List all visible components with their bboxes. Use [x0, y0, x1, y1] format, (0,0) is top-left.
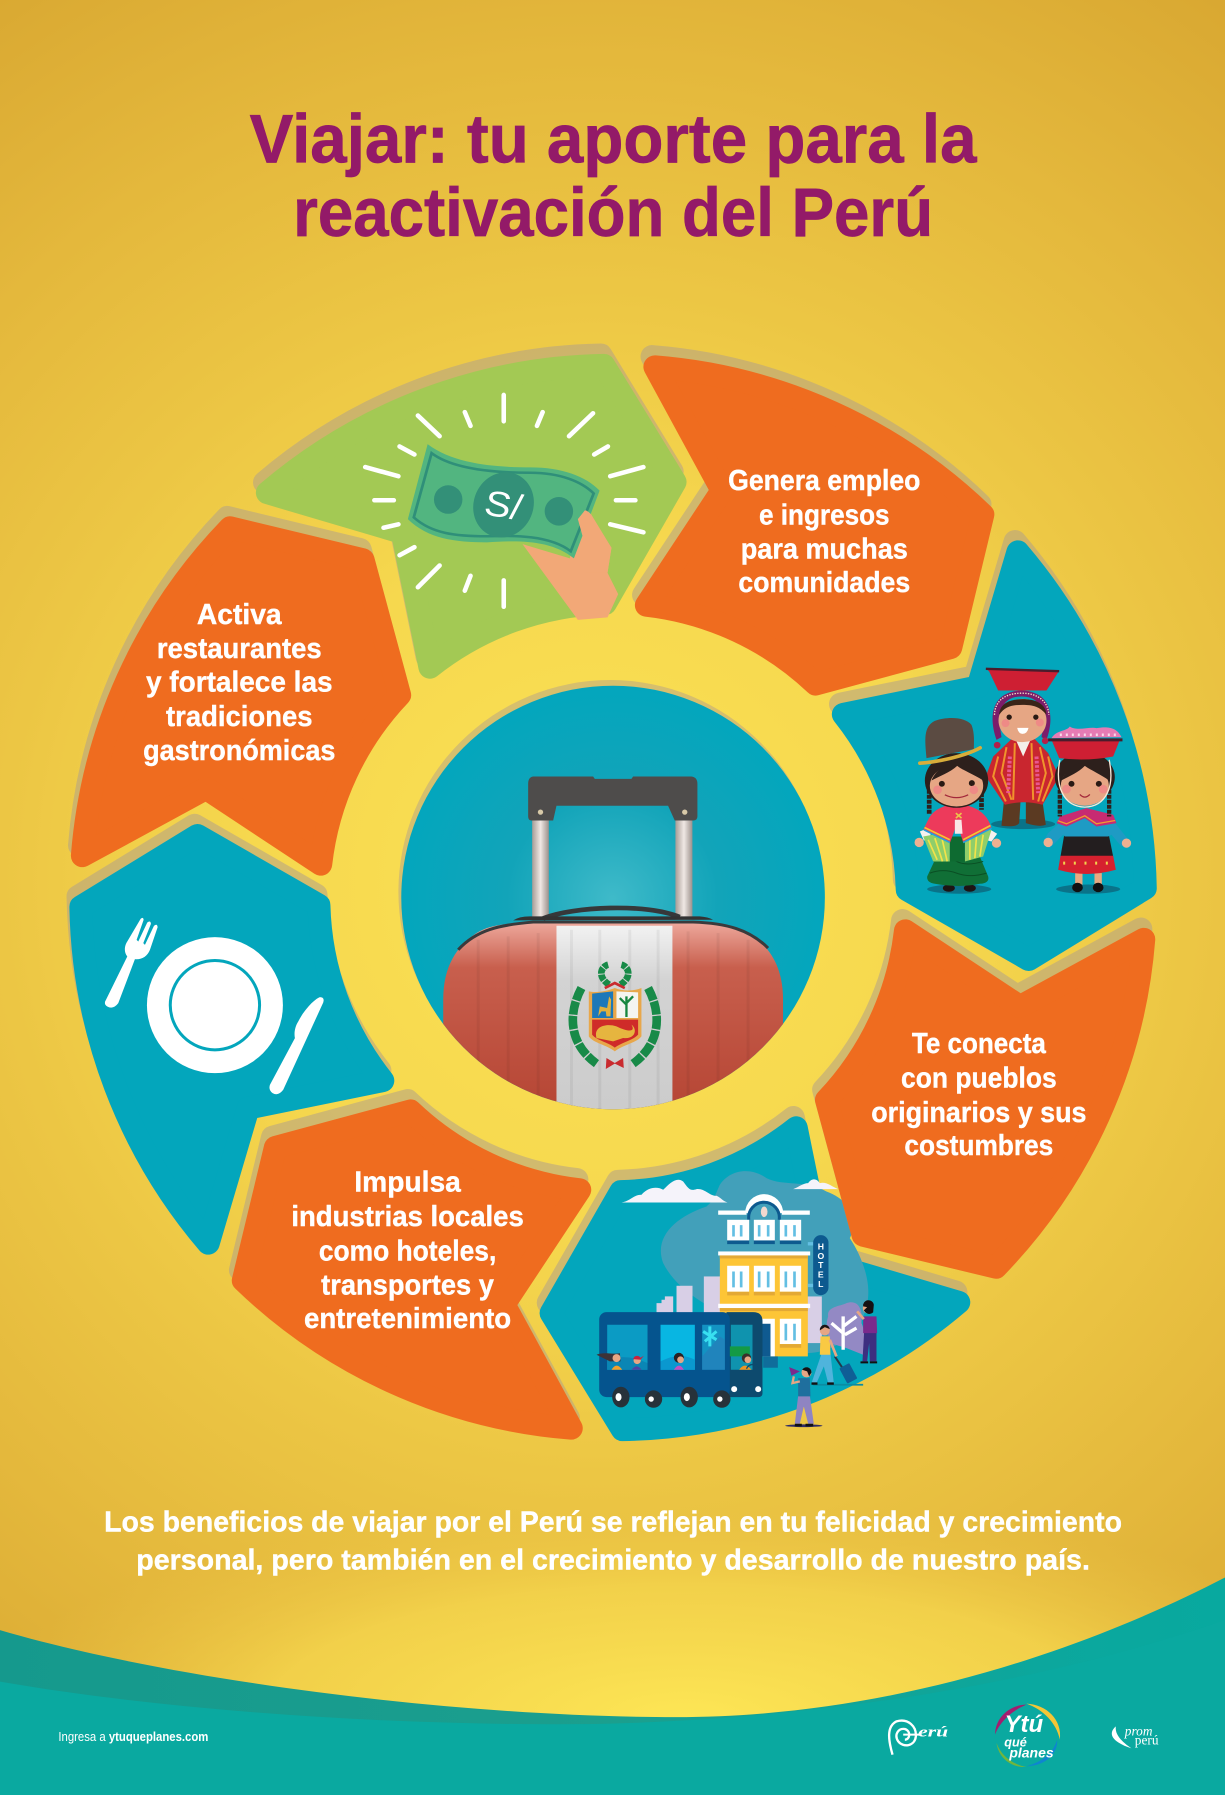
closing statement: personal, pero también en el crecimiento y desarrollo de nuestro país.	[136, 1544, 1090, 1576]
text: impulsa: transportes y	[321, 1270, 494, 1302]
text: activa	[143, 599, 335, 767]
footer teal band	[0, 1577, 1225, 1795]
text: genera empleo: Genera empleo	[728, 465, 920, 497]
hotel sign: L	[818, 1279, 824, 1289]
icon: banknote and hand: S/	[481, 483, 526, 528]
text: genera empleo: comunidades	[738, 567, 910, 599]
illustration: hotel, bus and travellers	[597, 1171, 877, 1427]
logo: promperú	[1112, 1723, 1159, 1748]
text: activa: restaurantes	[157, 633, 322, 665]
text: genera empleo: para muchas	[741, 534, 908, 566]
hotel sign: H	[818, 1241, 824, 1251]
title: Viajar: tu aporte para la	[250, 101, 977, 178]
icon: three andean figures	[915, 668, 1131, 894]
rear bus	[720, 1312, 763, 1397]
title: reactivación del Perú	[293, 174, 933, 251]
logo: Y tú qué planes: qué	[1004, 1735, 1027, 1749]
right woman	[1043, 726, 1131, 892]
text: impulsa: como hoteles,	[319, 1235, 496, 1267]
central circle: suitcase	[398, 680, 825, 1146]
footer link: Ingresa a ytuqueplanes.com	[58, 1730, 208, 1744]
man	[986, 668, 1059, 826]
logo: Y tú qué planes: Ytú	[1005, 1711, 1043, 1738]
passengers	[597, 1353, 760, 1370]
text: activa: Activa	[197, 599, 283, 631]
panel: plate (teal)	[78, 825, 383, 1243]
text: impulsa	[291, 1167, 524, 1335]
panel: people (teal)	[840, 541, 1145, 960]
traveller with beard	[857, 1300, 877, 1363]
text: activa: tradiciones	[166, 701, 313, 733]
panel: activa (orange)	[0, 467, 494, 979]
front bus	[599, 1312, 730, 1397]
hotel sign: T	[818, 1260, 824, 1270]
text: genera empleo: e ingresos	[759, 499, 890, 531]
text: impulsa: entretenimiento	[304, 1303, 511, 1335]
logo: promperú: perú	[1135, 1733, 1159, 1748]
closing statement	[104, 1507, 1122, 1576]
hotel sign: E	[818, 1269, 824, 1279]
title	[250, 101, 977, 251]
text: te conecta: originarios y sus	[871, 1097, 1086, 1129]
text: te conecta: costumbres	[904, 1130, 1053, 1162]
logo: Y tú qué planes: planes	[1008, 1744, 1054, 1760]
hotel sign	[813, 1235, 828, 1295]
panel: te conecta (orange)	[729, 806, 1225, 1318]
text: te conecta	[871, 1028, 1086, 1162]
text: impulsa: industrias locales	[291, 1201, 524, 1233]
hotel sign: O	[817, 1251, 824, 1261]
left woman	[915, 718, 1001, 892]
text: activa: gastronómicas	[143, 735, 335, 767]
text: te conecta: Te conecta	[912, 1028, 1047, 1060]
coat of arms	[573, 965, 657, 1069]
logo: Perú: erú	[918, 1724, 948, 1740]
text: genera empleo	[728, 465, 920, 599]
traveller with suitcase	[811, 1325, 863, 1385]
panel: impulsa (orange)	[190, 1006, 695, 1518]
panel: money (green)	[264, 355, 675, 667]
text: activa: y fortalece las	[146, 666, 333, 698]
icon: banknote and hand	[408, 444, 618, 620]
traveller with megaphone	[785, 1367, 822, 1427]
closing statement: Los beneficios de viajar por el Perú se reflejan en tu felicidad y crecimiento	[104, 1507, 1122, 1539]
wheels	[612, 1387, 731, 1408]
logo: Y tú qué planes	[995, 1704, 1060, 1767]
logo: Perú	[889, 1721, 948, 1755]
logo: promperú: prom	[1124, 1723, 1153, 1738]
text: impulsa: Impulsa	[354, 1167, 462, 1199]
icon: plate, fork and knife	[105, 918, 324, 1094]
panel: hotel and bus (teal)	[548, 1117, 959, 1430]
panel: genera empleo (orange)	[529, 266, 1033, 779]
text: te conecta: con pueblos	[901, 1063, 1057, 1095]
lilac tree	[827, 1302, 864, 1355]
icon: rays	[365, 395, 643, 607]
